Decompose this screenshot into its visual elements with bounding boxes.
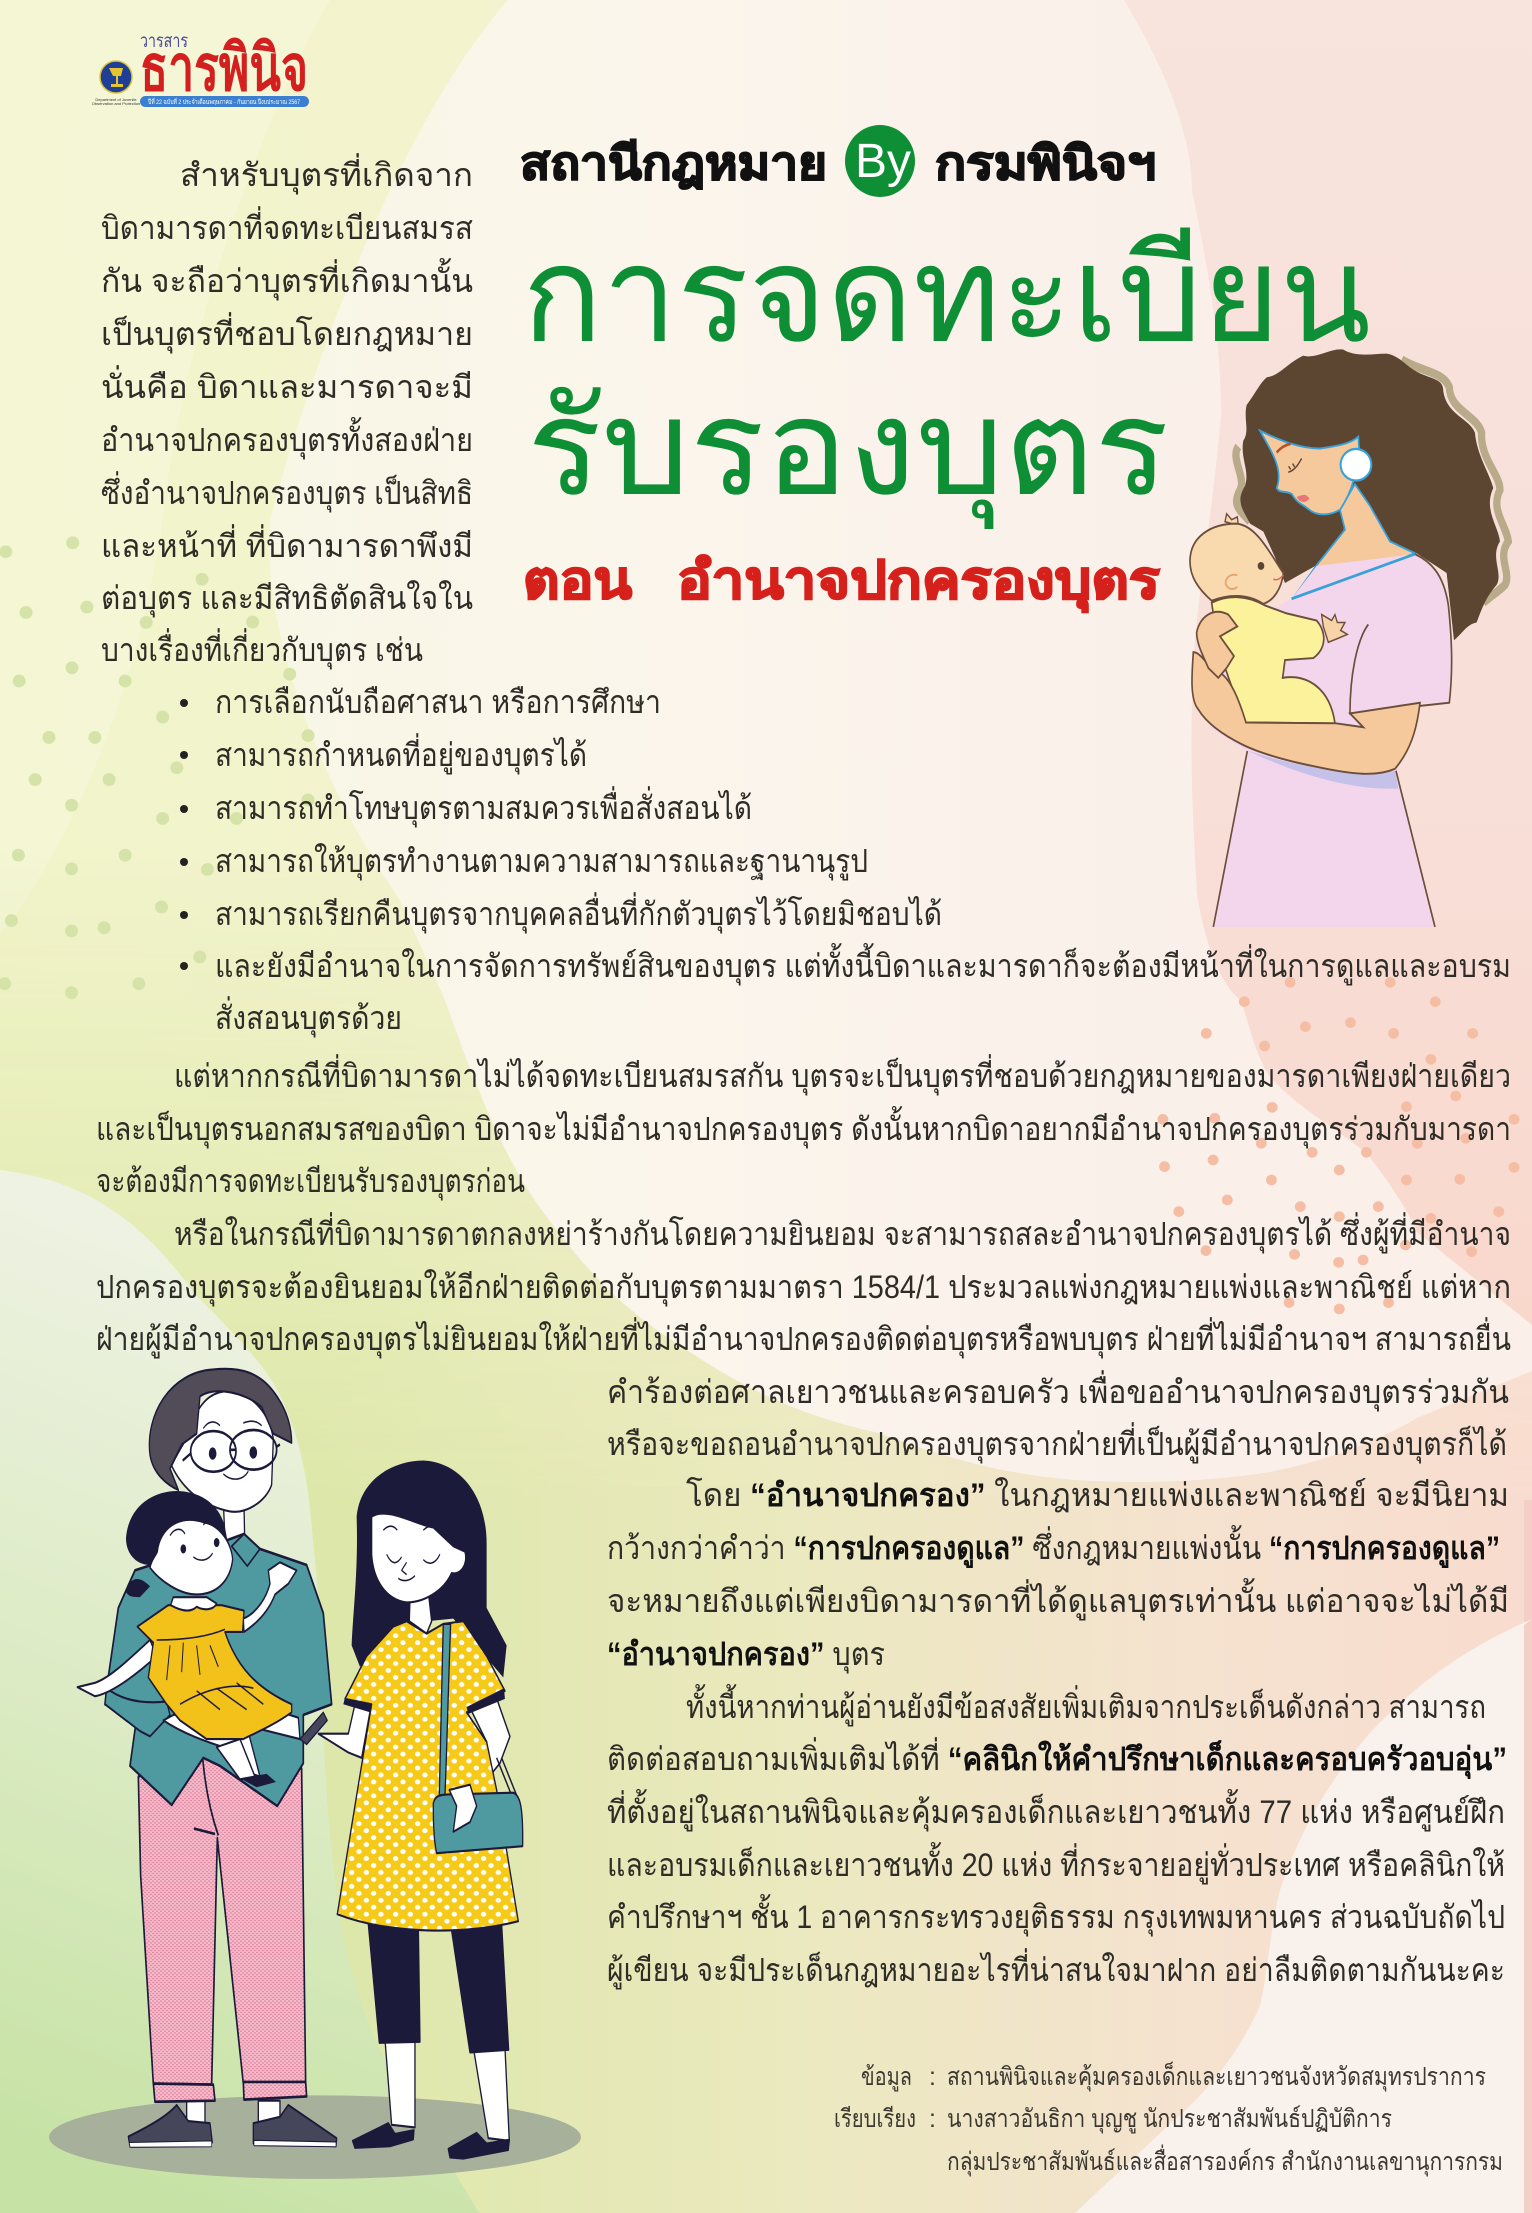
bullet list: สามารถเรียกคืนบุตรจากบุคคลอื่นที่กักตัวบุตรไว้โดยมิชอบได้ xyxy=(215,892,942,934)
child: foot on woman's side cuff xyxy=(300,1712,327,1744)
illustration: family of three xyxy=(49,1369,581,2179)
title line 1: การจดทะเบียน xyxy=(522,221,1371,370)
credits: ข้อมูล xyxy=(861,2063,912,2092)
bullet list: สามารถทำโทษบุตรตามสมควรเพื่อสั่งสอนได้ xyxy=(215,786,752,828)
By badge: By xyxy=(855,135,911,188)
man: shirt xyxy=(105,1534,332,1806)
subtitle xyxy=(523,552,1160,613)
man: hair xyxy=(149,1369,292,1490)
credits: : xyxy=(929,2105,936,2133)
face xyxy=(1260,431,1359,514)
paragraph: definition of custody: โดย “อำนาจปกครอง” ในกฎหมายแพ่งและพาณิชย์ จะมีนิยาม xyxy=(686,1477,1509,1513)
paragraph: where to get advice xyxy=(607,1684,1507,1990)
dress shadow xyxy=(1248,751,1398,789)
paragraph: divorce by consent xyxy=(96,1212,1511,1464)
neck and chest xyxy=(1293,484,1415,598)
body text: left column: กัน จะถือว่าบุตรที่เกิดมานั้น xyxy=(101,258,473,301)
logo: issue pill xyxy=(140,96,309,107)
child: arms xyxy=(77,1562,300,1777)
heading: column title xyxy=(520,125,1156,197)
bullet list: สั่งสอนบุตรด้วย xyxy=(215,996,402,1038)
heading right: กรมพินิจฯ xyxy=(935,137,1156,189)
body text: left column: นั่นคือ บิดาและมารดาจะมี xyxy=(101,365,473,405)
hair xyxy=(1240,349,1500,640)
man: ankles and shoes xyxy=(128,2101,337,2147)
subtitle label: ตอน xyxy=(523,552,632,610)
earring xyxy=(1341,449,1371,481)
logo text: small heading: วารสาร xyxy=(140,31,188,52)
body text: left column xyxy=(101,153,473,670)
child: leg xyxy=(217,1739,255,1779)
By badge xyxy=(845,125,915,197)
icon: department emblem xyxy=(92,61,140,106)
mother's arm xyxy=(1192,652,1420,774)
icon: department emblem: Department of Juvenile xyxy=(95,97,137,102)
decorative dots: green xyxy=(0,536,315,999)
body text: left column: เป็นบุตรที่ชอบโดยกฎหมาย xyxy=(101,312,473,354)
man: glasses xyxy=(183,1421,280,1479)
dress xyxy=(1210,554,1452,927)
child: dress xyxy=(137,1597,292,1739)
woman: hair back xyxy=(352,1461,507,1677)
logo: issue pill: ปีที่ 22 ฉบับที่ 2 ประจำเดือนพฤษภาคม - กันยายน ปีงบประมาณ 2567 xyxy=(148,97,300,106)
paragraph: where to get advice: ติดต่อสอบถามเพิ่มเติมได้ที่ “คลินิกให้คำปรึกษาเด็กและครอบครัวอบอุ่น” xyxy=(607,1737,1507,1780)
heading left: สถานีกฎหมาย xyxy=(520,137,827,189)
bullet list xyxy=(180,684,1511,1038)
logo text: journal name: ธารพินิจ xyxy=(140,32,308,104)
woman: dress xyxy=(337,1621,518,1931)
paragraph: definition of custody: จะหมายถึงแต่เพียงบิดามารดาที่ได้ดูแลบุตรเท่านั้น แต่อาจจะไม่ได้มี xyxy=(607,1578,1509,1621)
baby body xyxy=(1212,597,1335,723)
child: shoe xyxy=(240,1774,276,1787)
woman: head xyxy=(372,1514,466,1634)
body text: left column: สำหรับบุตรที่เกิดจาก xyxy=(180,153,473,195)
man: neck and head xyxy=(172,1391,273,1552)
decorative dots: orange xyxy=(1157,977,1519,1314)
credits: นางสาวอันธิกา บุญชู นักประชาสัมพันธ์ปฏิบัติการ xyxy=(947,2105,1392,2134)
baby head xyxy=(1190,514,1283,604)
baby hand xyxy=(1322,615,1347,642)
bullet list: การเลือกนับถือศาสนา หรือการศึกษา xyxy=(215,684,661,720)
ground shadow xyxy=(49,2095,581,2179)
paragraph: definition of custody: “อำนาจปกครอง” บุตร xyxy=(607,1636,885,1674)
woman: face xyxy=(383,1526,440,1581)
illustration: mother and baby xyxy=(1190,349,1508,927)
woman: arms xyxy=(318,1694,510,1830)
bullet list: สามารถให้บุตรทำงานตามความสามารถและฐานานุรูป xyxy=(215,843,868,881)
woman: bag xyxy=(433,1624,523,1853)
paragraph: unregistered parents xyxy=(96,1054,1511,1201)
main title xyxy=(522,221,1371,529)
woman: sleeve cuffs xyxy=(343,1688,505,1714)
body text: left column: ซึ่งอำนาจปกครองบุตร เป็นสิทธิ xyxy=(101,471,473,513)
paragraph: definition of custody xyxy=(607,1477,1509,1674)
body text: left column: และหน้าที่ ที่บิดามารดาพึงมี xyxy=(101,524,473,564)
subtitle text: อำนาจปกครองบุตร xyxy=(677,552,1160,613)
bullet list: สามารถกำหนดที่อยู่ของบุตรได้ xyxy=(215,733,587,775)
credits xyxy=(834,2061,1503,2177)
mother's upper hand xyxy=(1197,612,1237,678)
pale hair strand xyxy=(1236,360,1508,603)
woman: legs and shoes xyxy=(353,1924,509,2159)
man: trousers xyxy=(138,1752,307,2102)
credits: เรียบเรียง xyxy=(834,2105,916,2133)
credits: : xyxy=(929,2063,936,2091)
logo: journal masthead xyxy=(92,31,309,107)
body text: left column: ต่อบุตร และมีสิทธิตัดสินใจใน xyxy=(101,580,473,618)
title line 2: รับรองบุตร xyxy=(527,374,1169,529)
body text: left column: บิดามารดาที่จดทะเบียนสมรส xyxy=(101,206,473,246)
child: head xyxy=(150,1520,233,1594)
face details xyxy=(1277,444,1309,502)
paragraph: definition of custody: กว้างกว่าคำว่า “การปกครองดูแล” ซึ่งกฎหมายแพ่งนั้น “การปกครองดูแล” xyxy=(607,1525,1500,1569)
paragraph: unregistered parents: จะต้องมีการจดทะเบียนรับรองบุตรก่อน xyxy=(96,1163,525,1201)
body text: left column: อำนาจปกครองบุตรทั้งสองฝ่าย xyxy=(101,417,473,460)
body text: left column: บางเรื่องที่เกี่ยวกับบุตร เช่น xyxy=(101,628,423,670)
icon: department emblem: Observation and Protection xyxy=(92,101,140,106)
child: hair xyxy=(126,1491,230,1565)
